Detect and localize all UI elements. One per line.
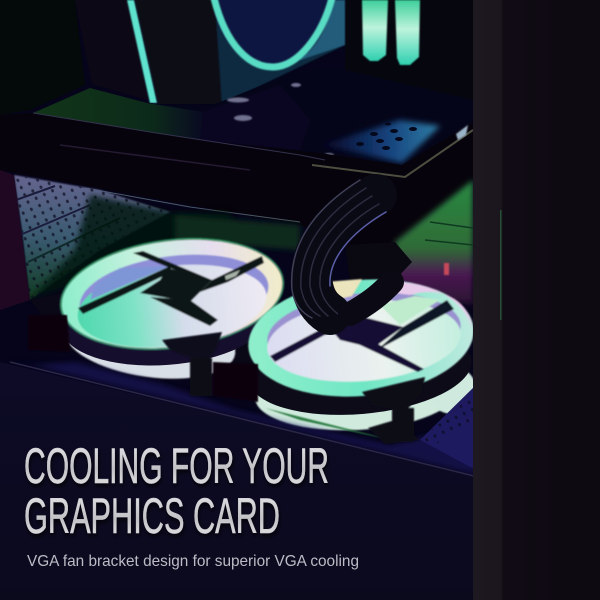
icon: RAM module LEDs — [362, 0, 420, 65]
bottom edge highlight — [10, 362, 474, 476]
title: COOLING FOR YOUR — [24, 438, 329, 494]
title: GRAPHICS CARD — [24, 488, 280, 544]
subtitle: VGA fan bracket design for superior VGA cooling — [27, 553, 359, 570]
panel: fan tray floor — [10, 360, 476, 475]
panel: right case pillar — [473, 0, 600, 600]
panel: right RGB fan — [243, 270, 479, 406]
card screws — [227, 83, 334, 157]
icon: pillar green light — [500, 210, 502, 320]
icon: fan clip left — [28, 315, 258, 402]
icon: cyan LED ring arc — [214, 0, 332, 67]
fan bracket X arms — [78, 251, 264, 326]
left side purple glow — [0, 170, 30, 310]
panel: graphics card side shroud — [0, 113, 473, 245]
title — [24, 438, 329, 544]
icon: power cable bundle — [292, 180, 392, 318]
plate mounting holes — [356, 122, 417, 150]
panel: left RGB fan — [54, 227, 290, 361]
panel: CPU cooler block — [135, 0, 345, 104]
panel: PCI slot covers — [14, 175, 240, 300]
panel: right dark motherboard edge — [345, 0, 473, 110]
left fan base layer — [30, 272, 271, 389]
icon: fan clip right — [362, 377, 425, 444]
right fan base layer — [245, 316, 476, 435]
icon: cyan LED strip — [127, 0, 157, 103]
panel: case front bottom — [0, 362, 476, 600]
panel: motherboard with green and purple lighting — [175, 180, 473, 305]
fan bracket X arms — [270, 317, 424, 372]
panel: graphics card backplate — [30, 70, 473, 170]
panel: upper left case interior — [0, 0, 148, 115]
